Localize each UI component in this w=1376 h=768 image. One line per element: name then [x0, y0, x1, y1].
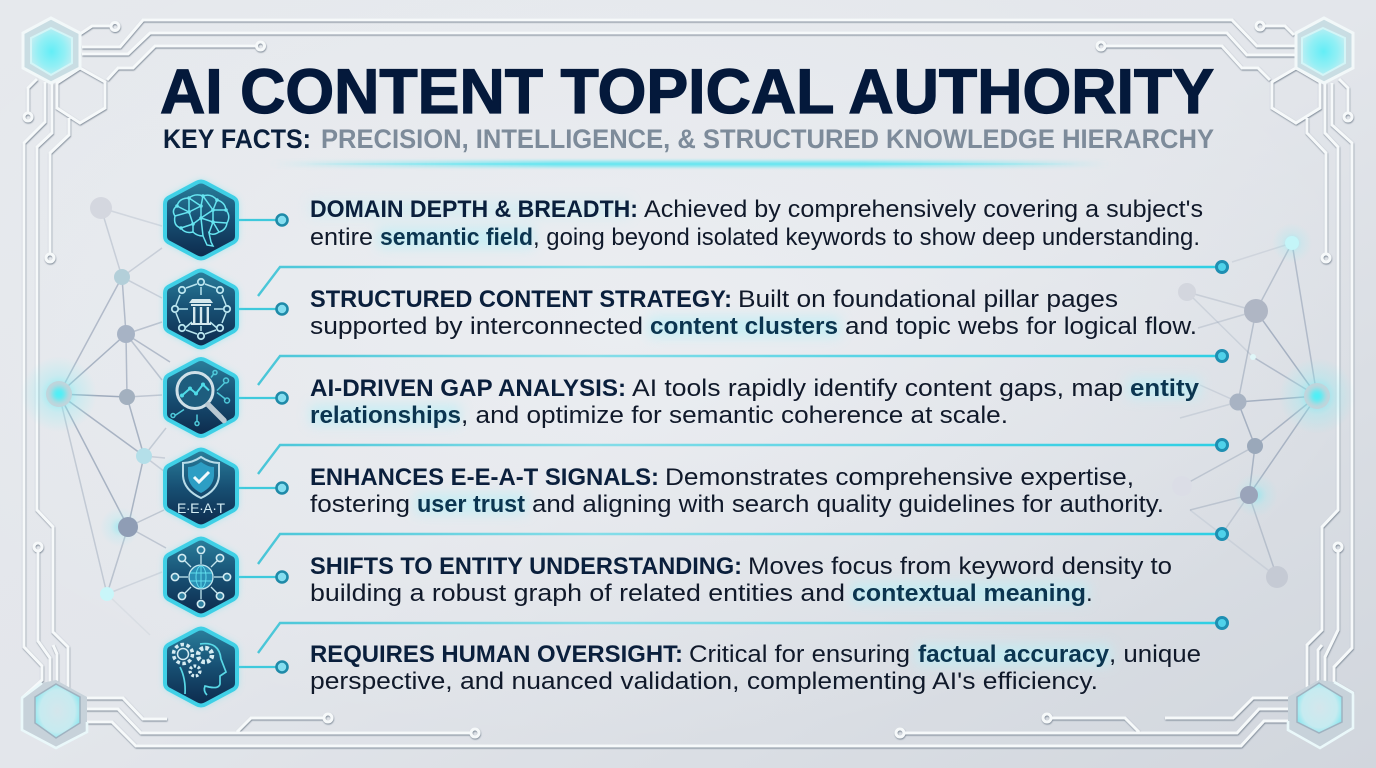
bottom traces — [83, 698, 1295, 746]
corner hexagon: bottom left — [22, 680, 87, 748]
icon: E-E-A-T shield — [165, 450, 237, 526]
fact 6: requires human oversight — [310, 641, 1201, 695]
fact 3: AI-driven gap analysis: , and optimize for semantic coherence at scale. — [461, 402, 1008, 429]
fact 5: shifts to entity understanding: Moves focus from keyword density to — [748, 553, 1172, 580]
corner hexagon: top left — [23, 18, 80, 83]
fact 4: enhances E-E-A-T signals: user trust — [417, 491, 525, 518]
subtitle: PRECISION, INTELLIGENCE, & STRUCTURED KNOWLEDGE HIERARCHY — [321, 124, 1214, 154]
fact 2: structured content strategy: content clusters — [650, 313, 838, 340]
leader end dots — [1216, 262, 1228, 628]
subtitle: KEY FACTS: — [163, 124, 311, 154]
fact 4: enhances E-E-A-T signals: Demonstrates comprehensive expertise, — [665, 464, 1134, 491]
fact 6: requires human oversight: Critical for ensuring — [689, 641, 910, 668]
fact 1: domain depth and breadth: Achieved by comprehensively covering a subject's — [644, 196, 1203, 223]
fact 5: shifts to entity understanding: SHIFTS TO ENTITY UNDERSTANDING: — [310, 553, 742, 580]
icon connectors — [238, 214, 288, 672]
icon: head with gears — [165, 628, 237, 706]
fact 2: structured content strategy: and topic webs for logical flow. — [845, 313, 1197, 340]
fact 6: requires human oversight: REQUIRES HUMAN OVERSIGHT: — [310, 641, 683, 668]
fact 6: requires human oversight: perspective, and nuanced validation, complementing AI's efficiency. — [310, 668, 1098, 695]
divider glow under subtitle — [270, 161, 1110, 167]
network: right — [1172, 223, 1355, 588]
icon: entity globe — [165, 538, 237, 616]
fact 6: requires human oversight: , unique — [1109, 641, 1201, 668]
fact 4: enhances E-E-A-T signals: fostering — [310, 491, 410, 518]
title: AI CONTENT TOPICAL AUTHORITY — [160, 57, 1214, 127]
fact 3: AI-driven gap analysis: AI tools rapidly identify content gaps, map — [632, 375, 1123, 402]
fact 2: structured content strategy — [310, 286, 1197, 340]
fact 1: domain depth and breadth: entire — [310, 224, 373, 251]
fact 2: structured content strategy: supported by interconnected — [310, 313, 643, 340]
text highlight glows — [310, 200, 1200, 665]
fact 5: shifts to entity understanding — [310, 553, 1172, 607]
fact 5: shifts to entity understanding: contextual meaning — [852, 580, 1086, 607]
fact 4: enhances E-E-A-T signals: ENHANCES E-E-A-T SIGNALS: — [310, 464, 659, 491]
fact 2: structured content strategy: STRUCTURED CONTENT STRATEGY: — [310, 286, 732, 313]
corner hexagon: bottom right — [1288, 680, 1353, 748]
fact 4: enhances E-E-A-T signals: and aligning with search quality guidelines for authority. — [532, 491, 1164, 518]
fact 2: structured content strategy: Built on foundational pillar pages — [738, 286, 1118, 313]
top right traces — [1097, 22, 1353, 693]
fact 1: domain depth and breadth: DOMAIN DEPTH & BREADTH: — [310, 196, 638, 223]
fact 1: domain depth and breadth: semantic field — [380, 224, 533, 251]
fact 1: domain depth and breadth: , going beyond isolated keywords to show deep understanding. — [533, 224, 1200, 251]
fact 3: AI-driven gap analysis: AI-DRIVEN GAP ANALYSIS: — [310, 375, 626, 402]
fact 6: requires human oversight: factual accuracy — [918, 641, 1110, 668]
icon: brain network — [165, 182, 237, 258]
icon: pillar and cluster — [165, 270, 237, 348]
fact 5: shifts to entity understanding: building a robust graph of related entities and — [310, 580, 845, 607]
icon: magnifier gap analysis — [165, 359, 237, 436]
fact 3: AI-driven gap analysis: relationships — [310, 402, 461, 429]
fact 4: enhances E-E-A-T signals — [310, 464, 1164, 518]
fact 3: AI-driven gap analysis: entity — [1130, 375, 1200, 402]
fact 1: domain depth and breadth — [310, 196, 1203, 251]
leader lines — [258, 267, 1216, 653]
corner hexagon: top right — [1296, 18, 1353, 83]
icon: E-E-A-T shield: E·E·A·T — [177, 500, 225, 516]
fact 5: shifts to entity understanding: . — [1086, 580, 1093, 607]
secondary hexagons — [57, 68, 1320, 123]
fact 3: AI-driven gap analysis — [310, 375, 1200, 429]
network: left — [21, 197, 170, 635]
